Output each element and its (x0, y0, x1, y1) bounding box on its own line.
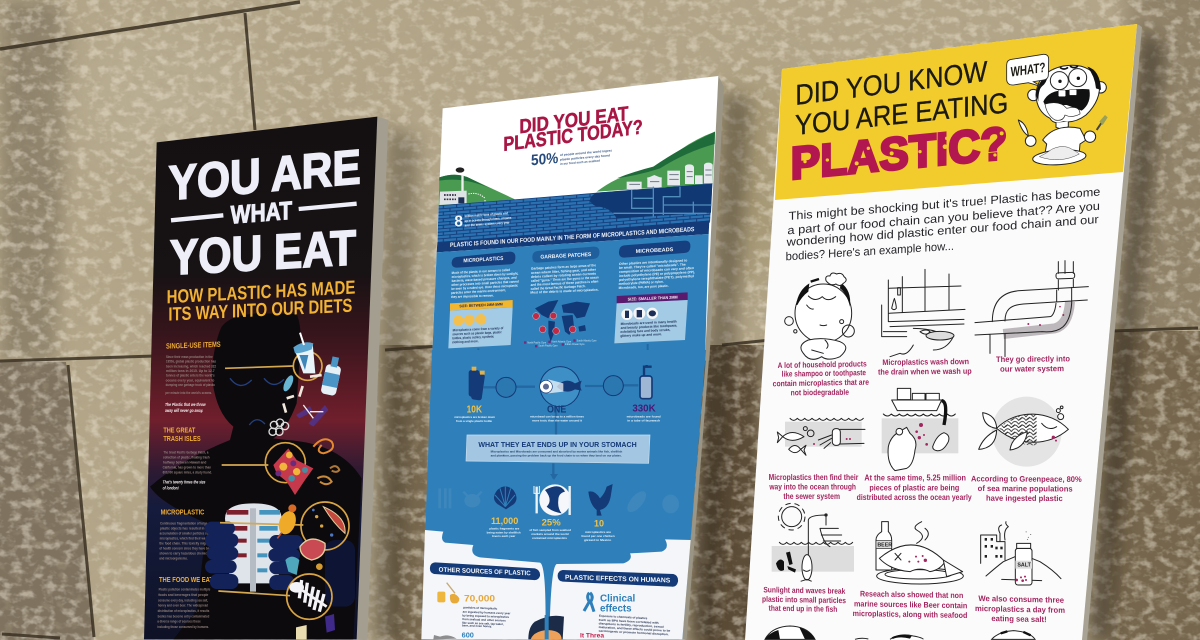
text: microplastics paragraph: be seen by a naked eye. Once these microplastic (451, 283, 518, 291)
icon: chicken (588, 484, 613, 516)
section: single-use items: oceans every year, equivalent to (166, 378, 215, 382)
statistic: 11,000: lovers each year (492, 534, 515, 538)
captions: row two: distributed across the ocean yearly (857, 493, 972, 502)
section: single-use items: tonnes of plastic enters the world's (166, 374, 215, 378)
panel: left poster You Are What You Eat (144, 117, 388, 639)
panel: centre poster Did You Eat Plastic Today upper (432, 76, 724, 361)
face details (230, 378, 284, 425)
world map (524, 300, 597, 348)
text: clinical effects: such as BPA have been correlated with (599, 618, 659, 625)
icon: factories and sea salt: SALT (1017, 563, 1032, 569)
text: clinical effects: carcinogenic or promote hormonal disruption. (599, 629, 669, 636)
captions: row one: Microplastics wash down (882, 357, 969, 367)
section: the food we eat: foods and beverages that people (158, 593, 208, 597)
statistic: 11,000: being eaten by shellfish (487, 530, 521, 534)
captions: row two (768, 473, 1082, 503)
icon: swirling gyres (313, 439, 339, 484)
statistic: 25%: contained microplastics (532, 536, 568, 540)
section: microplastic: microplastics, which find their way into (160, 537, 214, 541)
underground sewer (590, 184, 712, 218)
card: microplastics size: sources such as plastic bags, plastic (452, 330, 502, 336)
statistic: 10K: from a single plastic bottle (456, 419, 493, 423)
icon: drain pipe (975, 261, 1088, 357)
section: the food we eat (157, 575, 213, 629)
statistic: 25%: of fish sampled from seafood (529, 528, 571, 532)
yellow header band (775, 24, 1137, 200)
captions: row three: Sunlight and waves break (763, 585, 846, 596)
heading: clinical effects (600, 594, 635, 615)
statistic: 70,000: are ingested by humans every year (463, 610, 511, 615)
text: microplastics paragraph: bacteria, wave-based pressure changes, and (452, 276, 517, 283)
statistic: 11,000 (487, 516, 521, 538)
card: microbeads size: Microbeads are used in many health (621, 320, 677, 326)
title: plastic: PLASTIC? (791, 117, 1007, 189)
statistic: ONE: microbead can be up to a million times (530, 415, 585, 419)
card: microbeads size: and beauty products like toothpaste, (621, 324, 677, 330)
statistic: 70,000: from seafood and other sources (462, 617, 506, 623)
icon: water bottle (320, 356, 343, 396)
speech bubble: WHAT? (1011, 60, 1045, 80)
text: microbeads paragraph: Other plastics are intentionally designed to (619, 258, 687, 266)
icon: beer and seafood plate (876, 522, 963, 584)
circle: right microbead (603, 376, 623, 396)
pill: microbeads (619, 241, 690, 258)
partial red heading: It Threa (580, 633, 604, 640)
body silhouette (150, 313, 362, 639)
text: microplastics paragraph (451, 268, 520, 299)
icon: bird partial (433, 630, 474, 639)
title: What: WHAT (231, 197, 292, 230)
section: the food we eat: bodies has become entry contaminated (158, 614, 209, 618)
icon: plastic bottles (469, 367, 485, 401)
intro text: a part of our food chain can you believe that?? Are you (787, 200, 1100, 237)
pill: microplastics: MICROPLASTICS (463, 256, 504, 264)
section: microplastic: plastic objects has resulted in the (160, 527, 210, 531)
statistic: 330K: 330K (632, 404, 656, 415)
statistic caption: of people around the world ingest (560, 148, 612, 157)
icon: rib cage (225, 503, 282, 592)
section: the great trash isles: The Great Pacific Garbage Patch, a (163, 450, 209, 454)
statistic: 11,000: plastic fragments are (489, 527, 520, 531)
lower right-poster illustrations and captions (762, 354, 1082, 639)
captions: row three: eating sea salt! (991, 614, 1047, 624)
text: garbage patches paragraph: called the Great Pacific Garbage Patch. (531, 284, 586, 291)
world map: North Atlantic Gyre (552, 341, 572, 344)
connector to box (553, 407, 556, 478)
icon: honey jar (437, 583, 459, 603)
captions: row one: They go directly into (996, 354, 1070, 364)
text: microbeads paragraph: Microbeads, too, are pure plastic. (619, 284, 669, 290)
statistic caption: plastic particles every day found (560, 153, 610, 162)
captions: row two: the sewer system (783, 492, 840, 501)
captions: row two: of sea marine populations (978, 484, 1073, 493)
statistic: ONE (530, 404, 585, 423)
text: garbage patches paragraph: debris collect by rotating ocean currents (531, 272, 596, 279)
text: microplastics paragraph: Much of the plastic in our oceans is called (452, 268, 510, 275)
section: the food we eat: THE FOOD WE EAT (159, 575, 213, 584)
section: the food we eat: Plastic pollution contaminates multiple (159, 588, 210, 592)
icon: cargo ship and plastic waste (882, 388, 958, 471)
statistic: 330K: microbeads are found (627, 414, 661, 418)
section: single-use items: dumping one garbage truck of plastic (166, 383, 215, 387)
text: microbeads paragraph: include polyethylene (PE) or polypropylene (PP), (619, 270, 695, 278)
statistic: 10: gizzard in Mexico (584, 538, 612, 542)
icon: beer and seafood plate: BEER (877, 543, 892, 549)
statistic: 10: found per one chicken (581, 534, 615, 538)
arrows to fish (483, 385, 638, 387)
circle: fish magnified (540, 367, 582, 407)
card: microplastics size: bottles, plastic cutlery, synthetic (452, 335, 494, 340)
text: clinical effects (599, 614, 671, 636)
text: clinical effects: disruptions in fertility, reproduction, sexual (599, 621, 664, 629)
section: the great trash isles: collection of plastic, floating trash (163, 456, 210, 460)
connector lines (218, 366, 303, 596)
card: microplastics size: Microplastics come from a variety of (453, 326, 504, 332)
section: the food we eat: distribution of microplastics, it results (158, 609, 209, 613)
world map: South Atlantic Gyre (577, 339, 597, 342)
section: the great trash isles (163, 426, 212, 491)
section: single-use items: away will never go away. (165, 408, 203, 413)
world map: South Pacific Gyre (538, 345, 558, 348)
statistic: 8 million: million metric tons of plastic end (465, 211, 508, 218)
statistic: 25%: 25% (542, 518, 561, 528)
statistic: 10K (454, 405, 495, 423)
buildings (627, 163, 713, 189)
icon: bird partial: 600 (462, 630, 474, 639)
title: You Are: YOU ARE (169, 140, 361, 211)
statistic: 10: 10 (594, 519, 604, 529)
section: single-use items: 1950s, global plastic production has (166, 360, 216, 364)
captions: row three: microplastics, along with seafood (853, 609, 967, 620)
statistic: 70,000: 70,000 (464, 594, 495, 604)
text: clinical effects: maturation, and these effects could prove to be (599, 625, 671, 633)
captions: row one: like shampoo or toothpaste (782, 368, 866, 379)
faded sea creature icons (438, 488, 679, 515)
world map: Indian Ocean Gyre (565, 343, 585, 346)
banner: PLASTIC IS FOUND IN OUR FOOD MAINLY IN THE FORM OF MICROPLASTICS AND MICROBEADS (450, 226, 694, 249)
text: microbeads paragraph: be small. They're called "microbeads". The (619, 262, 686, 270)
section: the great trash isles: halfway between Hawaii and (163, 461, 206, 465)
left hill and factory (439, 167, 515, 206)
text: clinical effects: Exposure to chemicals of plastics (599, 614, 648, 620)
sea with brick pattern (437, 183, 712, 243)
captions: row two: pieces of plastic are being (869, 483, 959, 492)
text: microplastics paragraph: other processes into small particles that cannot (451, 279, 520, 287)
title line one: DID YOU KNOW (795, 56, 988, 112)
statistic: 25%: markets around the world (531, 532, 569, 536)
illustration: man's face (528, 615, 564, 639)
subtitle line one: HOW PLASTIC HAS MADE (167, 277, 355, 308)
pill: other sources of plastic (430, 562, 540, 580)
panel: centre poster lower (421, 350, 710, 640)
captions: row two: have ingested plastic (986, 494, 1063, 503)
captions: row three: Reseach also showed that non (860, 589, 963, 600)
captions: row three: marine sources like Beer contain (854, 599, 967, 610)
panel: right poster Did You Know You Are Eating Plastic (745, 24, 1142, 640)
title rule left (171, 215, 223, 220)
text: microplastics paragraph: particles enter the marine environment, (451, 288, 506, 295)
world map: North Pacific Gyre (527, 341, 547, 344)
callout box: Microplastics and Microbeads are consumed and absorbed by marine animals like fish, shellfish (491, 449, 623, 453)
right hills (597, 132, 715, 192)
text: garbage patches paragraph: ocean where litter, fishing gear, and other (531, 268, 597, 275)
icon: chicken (276, 504, 299, 538)
statistic caption: in our food such as seafood (560, 158, 600, 166)
section: the great trash isles: California, has grown to more than (163, 466, 211, 470)
section: the food we eat: including those consumed by humans. (157, 625, 209, 629)
intro text (786, 185, 1100, 263)
text: microbeads paragraph: polyethylene terephthalate (PET), polymethyl (619, 274, 694, 282)
icon: sun breaking plastic (772, 503, 854, 581)
text: microplastics paragraph: they are impossible to remove. (451, 294, 494, 299)
section: single-use items: The Plastic that we throw (165, 402, 206, 407)
statistic: 10 (581, 519, 615, 542)
section: single-use items: Since their mass production in the (166, 355, 213, 359)
section: the food we eat: honey and even beer. The widespread (158, 604, 208, 608)
intro text: bodies? Here's an example how... (786, 240, 954, 263)
statistic: 70,000: like such as sea salt, tap water, (462, 621, 504, 626)
partial characters at bottom edge (765, 626, 1035, 639)
statistic: ONE: more toxic than the water around it (532, 419, 582, 423)
statistic: 10: microplastics are (585, 530, 612, 534)
icon: trash island (273, 448, 313, 495)
title: You Eat: YOU EAT (170, 220, 356, 286)
statistic: 70,000: by being exposed to microplastics (462, 613, 509, 619)
title rule right (299, 204, 357, 209)
icon: awareness ribbon (584, 593, 594, 612)
card: microbeads size: glittery make up and more. (620, 332, 662, 338)
subtitle line two: ITS WAY INTO OUR DIETS (168, 296, 352, 326)
pill: garbage patches (532, 247, 599, 263)
captions: row two: According to Greenpeace, 80% (971, 474, 1082, 484)
section: single-use items (165, 340, 221, 413)
statistic: 8 million: and the sewer system every year (465, 220, 510, 228)
icon: fish skeleton (289, 580, 327, 612)
section: the great trash isles: of london! (163, 486, 179, 491)
icon: pump bottle (640, 365, 652, 399)
statistic: 10K: microplastics are broken down (454, 415, 495, 419)
statistic: 70,000 (462, 594, 511, 628)
text: garbage patches paragraph: Garbage patches form as large areas of the (531, 263, 596, 271)
icon: scallop (494, 486, 517, 509)
title line two: PLASTIC TODAY? (503, 116, 643, 156)
text: microbeads paragraph: methacrylate (PMMA) or nylon. (619, 280, 664, 286)
icon: bathroom tiles and drain (882, 269, 965, 357)
captions: row three: We also consume three (978, 594, 1065, 605)
intro text: This might be shocking but it's true! Plastic has become (789, 185, 1100, 223)
section: microplastic: the food chain. This toxicity might be (159, 542, 213, 546)
statistic: 11,000: 11,000 (491, 516, 518, 526)
card: microplastics size (448, 300, 513, 348)
callout box (466, 435, 650, 463)
section: microplastic: and microorganisms. (159, 557, 188, 561)
captions: row one (773, 354, 1070, 397)
captions: row one: not biodegradable (791, 388, 849, 397)
icon: plastic debris (269, 374, 328, 435)
statistic: ONE: ONE (547, 404, 566, 415)
pill: microplastics (452, 252, 515, 268)
icon: plate with dolphin (534, 484, 571, 516)
intro text: wondering how did plastic enter our food chain and our (786, 213, 1099, 249)
icon circles (265, 352, 349, 619)
blue body (432, 234, 709, 361)
statistic: 10K: 10K (467, 405, 482, 416)
heading: clinical effects: Clinical (600, 594, 635, 605)
callout box: WHAT THEY EAT ENDS UP IN YOUR STOMACH (478, 440, 637, 449)
card: microbeads size: SIZE: SMALLER THAN 2MM (628, 294, 678, 302)
statistic: 50%: 50% (531, 150, 559, 169)
section: single-use items: million tons in 2015. Up to 12.7 (166, 369, 215, 373)
text: garbage patches paragraph: Most of the debris is made of microplastics. (530, 288, 599, 295)
section: single-use items: SINGLE-USE ITEMS (166, 340, 221, 351)
card: microbeads size (614, 292, 688, 343)
section: microplastic: MICROPLASTIC (161, 508, 205, 517)
lungs (205, 522, 303, 590)
captions: row three: microplastics a day from (975, 604, 1065, 615)
pill: plastic effects on humans: PLASTIC EFFECTS ON HUMANS (565, 574, 671, 584)
text: garbage patches paragraph (530, 263, 599, 295)
pill: other sources of plastic: OTHER SOURCES OF PLASTIC (439, 567, 531, 577)
text: microplastics paragraph: microplastics, which is broken down by sunlight, (452, 272, 518, 279)
section: the great trash isles: TRASH ISLES (163, 434, 201, 443)
captions: row three (762, 585, 1065, 624)
statistic caption (560, 148, 612, 166)
icon: fish with scales (979, 397, 1068, 467)
icon: shell (285, 557, 323, 575)
statistic: 25% (529, 518, 571, 540)
section: the great trash isles: 600,000 square miles, a study found. (163, 471, 212, 475)
pill: microbeads: MICROBEADS (636, 247, 674, 255)
heading: clinical effects: effects (600, 604, 632, 615)
title line two: YOU ARE EATING (795, 87, 1008, 142)
captions: row one: contain microplastics that are (773, 378, 869, 388)
glow on right of torso (325, 540, 355, 607)
captions: row one: our water system (1000, 364, 1064, 374)
captions: row one: the drain when we wash up (878, 367, 972, 377)
statistic: 8 million (454, 211, 511, 231)
statistic: 8 million: 8 (454, 214, 463, 231)
section: single-use items: per minute into the world's oceans. (165, 391, 212, 395)
statistic: 330K (627, 404, 661, 422)
section: the food we eat: a diverse range of sources these (157, 620, 201, 624)
icon: plastic cup (293, 333, 315, 373)
icon: sea creatures (300, 507, 345, 560)
section: microplastic: of health concern since they have been (159, 547, 213, 551)
illustration: shocked character (1007, 54, 1108, 167)
icon: factories and sea salt (981, 522, 1061, 585)
captions: row one: A lot of household products (778, 359, 867, 370)
section: microplastic: accumulation of smaller particles called (160, 532, 213, 536)
text: microbeads paragraph: composition of microbeads can vary and often (619, 266, 694, 274)
statistic: 330K: in a tube of facewash (627, 418, 660, 422)
statistic: 70,000: beer, and even honey. (462, 623, 492, 628)
section: the great trash isles: THE GREAT (163, 426, 196, 435)
captions: row three: plastic into small particles (762, 595, 846, 605)
pill: plastic effects on humans (558, 570, 678, 587)
captions: row two: At the same time, 5.25 million (864, 474, 966, 483)
card: microplastics size: clothing and more. (452, 339, 479, 344)
icon: fish and sewer outflow (777, 418, 865, 455)
section: single-use items: been increasing, which reached 322 (166, 364, 216, 368)
captions: row two: way into the ocean through (768, 483, 856, 492)
section: microplastic: shown to carry hazardous chemicals (159, 552, 211, 556)
icon: bottom scraps (296, 614, 335, 639)
statistic: 70,000: particles of microplastic (463, 605, 498, 611)
text: microbeads paragraph (619, 258, 695, 290)
white lower area with drip (421, 530, 691, 639)
statistic: 8 million: up in oceans through rivers, streams (465, 216, 511, 223)
section: microplastic: Continuous fragmentation of large (160, 522, 207, 526)
pill: garbage patches: GARBAGE PATCHES (540, 252, 592, 261)
title line one: DID YOU EAT (519, 103, 629, 138)
circle: left microplastic (496, 377, 516, 397)
captions: row three: that end up in the fish (769, 604, 837, 614)
section: the great trash isles: That's twenty times the size (163, 480, 206, 485)
section: microplastic (159, 508, 214, 561)
callout box: and plankton, passing the problem back up the food chain to us when they land on our plates. (491, 454, 622, 458)
section: the food we eat: consume every day, including sea salt, (158, 598, 208, 602)
captions: row two: Microplastics then find their (769, 473, 858, 482)
arrows down (475, 344, 651, 360)
icon: person washing hair (785, 273, 854, 359)
card: microbeads size: exfoliating face and body scrubs, (620, 328, 670, 334)
text: garbage patches paragraph: called "gyres." There are five gyres in the ocean (531, 275, 599, 283)
card: microplastics size: SIZE: BETWEEN 2MM-5MM (459, 302, 503, 308)
text: garbage patches paragraph: and the most famous of these patches is often (531, 279, 598, 287)
